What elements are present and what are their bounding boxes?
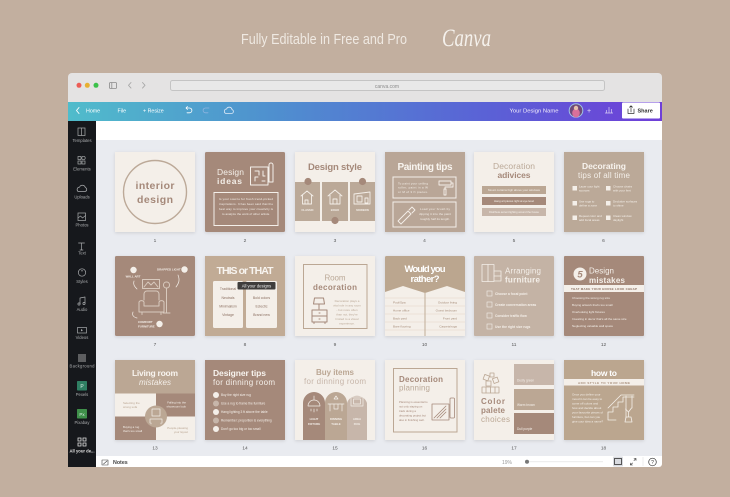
bottom status bar: Notes xyxy=(113,460,128,466)
panel: card 2 design ideas: ideas xyxy=(217,176,242,186)
panel: card 17 color palette choices: choices xyxy=(481,415,510,424)
panel: card 10 would you rather: Front yard xyxy=(443,316,457,320)
panel: card 6 decorating tips: daylight xyxy=(613,218,624,222)
panel: card 9 room decoration xyxy=(295,256,375,336)
panel: card 6 decorating tips: with your feet xyxy=(613,188,631,192)
panel: card 8 this or that: Vintage xyxy=(222,313,234,317)
panel: card 4 painting tips: Painting tips xyxy=(398,162,453,173)
panel: card 4 painting tips: or M of 3 ft pieces. xyxy=(398,190,428,194)
panel: card 14 designer tips: Designer tips xyxy=(213,368,266,378)
icon: pixabay xyxy=(75,409,90,425)
panel: card 13 living room mistakes: Living room xyxy=(132,368,178,378)
panel: card 18 how to: your favourite pieces of xyxy=(572,410,603,414)
card numbers: 18 xyxy=(601,446,606,452)
title: Canva xyxy=(442,25,491,52)
panel: card 13 living room mistakes: Selecting the xyxy=(123,401,140,405)
icon: text: Text xyxy=(78,250,87,256)
panel: card 5 decoration advices: Decoration xyxy=(493,161,535,171)
icon: blueprint xyxy=(250,163,273,185)
panel: card 11 arranging furniture: Create conversation areas xyxy=(495,303,536,307)
icon: pexels xyxy=(76,381,88,397)
panel: card 17 color palette choices: Color xyxy=(481,397,505,406)
panel: card 2 design ideas: Design xyxy=(217,167,244,177)
panel: card 6 decorating tips: Clean window xyxy=(613,214,633,218)
panel: card 6 decorating tips: Use rugs to xyxy=(579,200,595,204)
panel: card 6 decorating tips: sources xyxy=(579,188,590,192)
panel: card 9 room decoration: Decoration plays a xyxy=(335,299,360,303)
icon: photos xyxy=(75,213,89,228)
card numbers xyxy=(152,238,606,452)
bottom status bar: ? xyxy=(651,460,654,466)
panel: card 2 design ideas: to analyze the work of other artists. xyxy=(222,212,270,216)
panel: card 12 design mistakes: Overlooking light fixtures xyxy=(572,310,605,314)
card numbers: 14 xyxy=(242,446,248,452)
panel: card 18 how to: Once you define your xyxy=(572,392,601,396)
panel: card 12 design mistakes: Neglecting valuable wall space xyxy=(572,324,613,328)
panel: card 7 living room diagram xyxy=(115,256,195,336)
panel: card 16 decoration planning: not only staying on xyxy=(399,404,423,408)
panel: card 9 room decoration: vital role in any room xyxy=(333,304,361,308)
panel: card 6 decorating tips: Layer your light xyxy=(579,184,600,188)
icon: uploads xyxy=(74,185,90,200)
panel: card 1 interior design xyxy=(115,152,195,232)
card numbers: 15 xyxy=(332,446,338,452)
panel: card 18 how to: come off colors and xyxy=(572,402,598,406)
panel: card 13 living room mistakes: Falling into the xyxy=(167,400,186,404)
card numbers: 4 xyxy=(423,238,426,244)
panel: card 6 decorating tips: Decorating xyxy=(582,161,626,171)
panel: card 10 would you rather: Outdoor living xyxy=(438,300,457,304)
icon: pexels: P xyxy=(80,384,84,390)
panel: card 11 arranging furniture: Arranging xyxy=(505,266,541,276)
panel: card 4 painting tips: roughly half its length. xyxy=(420,217,450,221)
panel: card 5 decoration advices: Mount curtains high above your windows xyxy=(488,188,541,192)
panel: card 8 this or that: Brand new xyxy=(253,313,270,317)
panel: card 4 painting tips: roller, paint in a W xyxy=(398,186,428,190)
panel: card 11 arranging furniture: Choose a focal point xyxy=(495,292,528,296)
panel: card 17 color palette choices xyxy=(474,360,554,440)
panel: card 10 would you rather: Pool/Spa xyxy=(393,300,406,304)
icon: blinds and ruler xyxy=(432,398,454,420)
panel: card 6 decorating tips: to shine xyxy=(613,204,624,208)
panel: card 14 designer tips: Hang lighting 3 ft above the table xyxy=(221,410,268,414)
panel: card 12 design mistakes: Design xyxy=(589,266,614,276)
panel: card 8 this or that: Neutrals xyxy=(221,296,235,300)
panel: card 16 decoration planning xyxy=(385,360,465,440)
panel: card 13 living room mistakes: showroom look xyxy=(167,404,187,408)
panel: card 8 this or that xyxy=(205,256,285,336)
panel: card 6 decorating tips: Declutter surfaces xyxy=(613,200,638,204)
panel: card 4 painting tips: Load your brush by xyxy=(420,207,450,211)
card numbers: 1 xyxy=(154,238,157,244)
panel: card 10 would you rather: rather? xyxy=(410,274,440,285)
panel: card 7 living room diagram: FURNITURE xyxy=(138,324,155,328)
panel: card 8 this or that: THIS or THAT xyxy=(216,265,274,277)
panel: card 18 how to: give your idea a name? xyxy=(572,420,604,424)
panel: card 16 decoration planning: Planning is essential to xyxy=(399,400,428,404)
card numbers: 16 xyxy=(422,446,427,452)
panel: card 8 this or that: Eclectic xyxy=(255,304,268,308)
panel: card 9 room decoration: experience. xyxy=(339,322,355,326)
toolbar: Your Design Name xyxy=(510,108,559,114)
tooltip: all your designs xyxy=(238,282,276,290)
card numbers: 11 xyxy=(512,342,517,348)
panel: card 13 living room mistakes: mistakes xyxy=(139,378,171,387)
panel: card 6 decorating tips: Repeat color and xyxy=(579,214,602,218)
panel: card 11 arranging furniture: Use the right size rugs xyxy=(495,325,531,329)
panel: card 8 this or that: Minimalism xyxy=(219,304,237,308)
card numbers: 13 xyxy=(152,446,158,452)
card numbers: 8 xyxy=(244,342,247,348)
panel: card 1 interior design: design xyxy=(137,194,173,206)
panel: card 13 living room mistakes xyxy=(115,360,195,440)
toolbar: Share xyxy=(638,108,653,114)
panel: card 15 buy items: Buy items xyxy=(316,368,355,377)
icon: videos: Videos xyxy=(76,335,88,340)
panel: card 7 living room diagram: DRAPPED LIGHT xyxy=(157,268,181,272)
toolbar xyxy=(68,102,662,121)
toolbar: + xyxy=(587,108,591,115)
panel: card 18 how to: furniture, but can you xyxy=(572,415,601,419)
panel: card 5 decoration advices xyxy=(474,152,554,232)
panel: card 6 decorating tips: add focal areas xyxy=(579,218,600,222)
icon: photos: Photos xyxy=(75,222,89,228)
panel: card 14 designer tips xyxy=(205,360,285,440)
panel: card 18 how to: ADD STYLE TO YOUR HOME xyxy=(578,381,630,385)
panel: card 4 painting tips: dipping it into the paint xyxy=(419,212,451,216)
panel: card 6 decorating tips: define a zone xyxy=(579,204,597,208)
icon: all your designs xyxy=(70,438,94,454)
panel: card 17 color palette choices: Dusty green xyxy=(517,378,534,382)
window title bar: canva.com xyxy=(375,84,399,90)
icon: pixabay: Px xyxy=(79,412,85,417)
panel: card 8 this or that: Traditional xyxy=(220,287,236,291)
white page header strip xyxy=(96,121,662,140)
icon: audio xyxy=(77,297,88,312)
panel: card 15 buy items: FIXTURE xyxy=(308,422,320,426)
panel: card 14 designer tips: for dinning room xyxy=(213,378,275,387)
panel: card 16 decoration planning: planning xyxy=(399,384,430,392)
icon: uploads: Uploads xyxy=(74,194,90,200)
icon: templates: Templates xyxy=(72,138,92,143)
icon: elements: Elements xyxy=(73,166,91,172)
icon: text xyxy=(78,243,87,256)
icon: background xyxy=(70,354,95,368)
icon: pexels: Pexels xyxy=(76,392,88,397)
panel: card 15 buy items: DINNING xyxy=(330,417,343,421)
icon: background: Background xyxy=(70,364,95,368)
panel: card 13 living room mistakes: People-pleasing xyxy=(167,426,188,430)
panel: card 10 would you rather: Would you xyxy=(404,264,446,275)
panel: card 9 room decoration: than not, they're xyxy=(336,312,358,316)
toolbar: File xyxy=(118,108,126,114)
panel: card 11 arranging furniture: Consider traffic flow xyxy=(495,314,527,318)
card numbers: 7 xyxy=(154,342,157,348)
panel: card 4 painting tips: To paint your ceiling xyxy=(398,182,428,186)
title: Fully Editable in Free and Pro xyxy=(241,31,407,48)
panel: card 1 interior design: interior xyxy=(136,180,174,192)
icon: styles: Styles xyxy=(76,279,88,284)
panel: card 13 living room mistakes: that's too small xyxy=(123,429,143,433)
panel: card 12 design mistakes: Buying artwork that's too small xyxy=(572,303,613,307)
icon: staircase and plant xyxy=(608,395,634,422)
panel: card 12 design mistakes: Choosing the wrong rug size xyxy=(572,296,610,300)
panel: card 18 how to xyxy=(564,360,644,440)
panel: card 14 designer tips: Don't go too big or too small xyxy=(221,427,261,431)
panel: card 3 design style: MODERN xyxy=(356,208,369,212)
panel: card 3 design style xyxy=(295,152,375,232)
panel: card 17 color palette choices: Dull purple xyxy=(517,427,532,431)
panel: card 2 design ideas: inspirations. It has been said that the xyxy=(219,202,273,206)
panel: card 10 would you rather: Home office xyxy=(393,308,410,312)
tooltip: all your designs: All your designs xyxy=(242,284,271,289)
panel: card 11 arranging furniture xyxy=(474,256,554,336)
icon: videos xyxy=(76,328,88,340)
panel: card 18 how to: how to xyxy=(591,368,617,378)
panel: card 10 would you rather: Carpets/rugs xyxy=(439,324,457,328)
card numbers: 12 xyxy=(601,342,606,348)
panel: card 3 design style: Design style xyxy=(308,162,362,173)
panel: card 15 buy items xyxy=(295,360,375,440)
card numbers: 6 xyxy=(602,238,605,244)
panel: card 10 would you rather: Bare flooring xyxy=(393,324,411,328)
icon: pixabay: Pixabay xyxy=(75,420,90,425)
workspace canvas xyxy=(96,140,662,456)
panel: card 5 decoration advices: adivices xyxy=(498,170,531,180)
panel: card 2 design ideas xyxy=(205,152,285,232)
panel: card 2 design ideas: best way to improve your creativity is xyxy=(219,207,274,211)
panel: card 11 arranging furniture: furniture xyxy=(505,276,541,284)
panel: card 18 how to: how and decide about xyxy=(572,406,602,410)
panel: card 8 this or that: Bold colors xyxy=(253,296,270,300)
panel: card 15 buy items: for dinning room xyxy=(304,377,366,386)
panel: card 6 decorating tips xyxy=(564,152,644,232)
panel: card 6 decorating tips: tips of all time xyxy=(578,171,631,180)
panel: card 9 room decoration: decoration xyxy=(313,283,357,292)
panel: card 7 living room diagram: COMFORT xyxy=(138,320,153,324)
card numbers: 2 xyxy=(244,238,247,244)
panel: card 9 room decoration: Room xyxy=(324,274,346,282)
panel: card 13 living room mistakes: Buying a rug xyxy=(123,425,140,429)
panel: card 16 decoration planning: decorating project but xyxy=(399,414,426,418)
bottom status bar: 19% xyxy=(502,460,513,466)
panel: card 17 color palette choices: palete xyxy=(481,406,506,415)
panel: card 16 decoration planning: also in finishing well. xyxy=(399,418,425,422)
panel: card 3 design style: CLASSIC xyxy=(301,208,314,212)
card numbers: 10 xyxy=(422,342,427,348)
panel: card 15 buy items: AREA xyxy=(353,417,362,421)
panel: card 18 how to: mood it can be easy to xyxy=(572,397,603,401)
panel: card 2 design ideas: Is your source for fresh trend-picked xyxy=(219,197,273,201)
sidebar xyxy=(68,121,96,467)
card numbers: 17 xyxy=(511,446,517,452)
editor window xyxy=(68,73,662,467)
panel: card 10 would you rather: Back yard xyxy=(393,316,407,320)
icon: templates xyxy=(72,128,92,143)
panel: card 13 living room mistakes: wrong sofa xyxy=(123,405,138,409)
panel: card 16 decoration planning: track during a xyxy=(399,409,416,413)
panel: card 12 design mistakes: THAT MAKE YOUR HOUSE LOOK CHEAP xyxy=(571,287,637,291)
panel: card 15 buy items: RUG xyxy=(354,422,361,426)
panel: card 15 buy items: TABLE xyxy=(331,422,341,426)
panel: card 5 decoration advices: Distribute accent lighting around the house xyxy=(489,210,539,214)
panel: card 5 decoration advices: Hang art pieces right at eye level xyxy=(494,199,534,203)
panel: card 9 room decoration: limited to a visual xyxy=(335,317,359,321)
panel: card 14 designer tips: Remember: proportion is everything xyxy=(221,418,272,422)
toolbar: Home xyxy=(86,108,100,114)
panel: card 15 buy items: LIGHT xyxy=(310,417,319,421)
card numbers: 9 xyxy=(334,342,337,348)
panel: card 9 room decoration: - but more often xyxy=(336,308,358,312)
icon: elements xyxy=(73,156,91,172)
panel: card 16 decoration planning: Decoration xyxy=(399,375,443,384)
card numbers: 5 xyxy=(513,238,516,244)
panel: card 4 painting tips xyxy=(385,152,465,232)
panel: card 7 living room diagram: WALL ART xyxy=(126,274,141,278)
bottom status bar xyxy=(96,456,662,467)
panel: card 12 design mistakes: 5 xyxy=(577,270,583,280)
panel: card 14 designer tips: Use a rug to frame the furniture xyxy=(221,402,266,406)
panel: card 12 design mistakes: Investing in decor that's all the same size xyxy=(572,317,627,321)
icon: styles xyxy=(76,269,88,284)
panel: card 10 would you rather xyxy=(385,256,465,336)
icon: armchair and lamp xyxy=(139,280,170,314)
icon: nightstand xyxy=(312,298,327,324)
panel: card 17 color palette choices: Warm brown xyxy=(517,403,535,407)
panel: card 10 would you rather: Guest bedroom xyxy=(436,308,457,312)
toolbar: + Resize xyxy=(143,108,164,114)
icon: wardrobe and drawers xyxy=(482,264,501,282)
icon: audio: Audio xyxy=(77,307,88,312)
title xyxy=(241,25,491,52)
panel: card 12 design mistakes xyxy=(564,256,644,336)
panel: card 14 designer tips: Buy the right size rug xyxy=(221,393,251,397)
card numbers: 3 xyxy=(334,238,337,244)
icon: colour blocks xyxy=(482,373,499,393)
panel: card 13 living room mistakes: your layout xyxy=(174,430,188,434)
icon: all your designs: All your de... xyxy=(70,448,94,454)
panel: card 6 decorating tips: Choose chairs xyxy=(613,184,633,188)
window title bar xyxy=(68,73,662,102)
panel: card 3 design style: BOHO xyxy=(331,208,340,212)
panel: card 12 design mistakes: mistakes xyxy=(589,276,626,285)
